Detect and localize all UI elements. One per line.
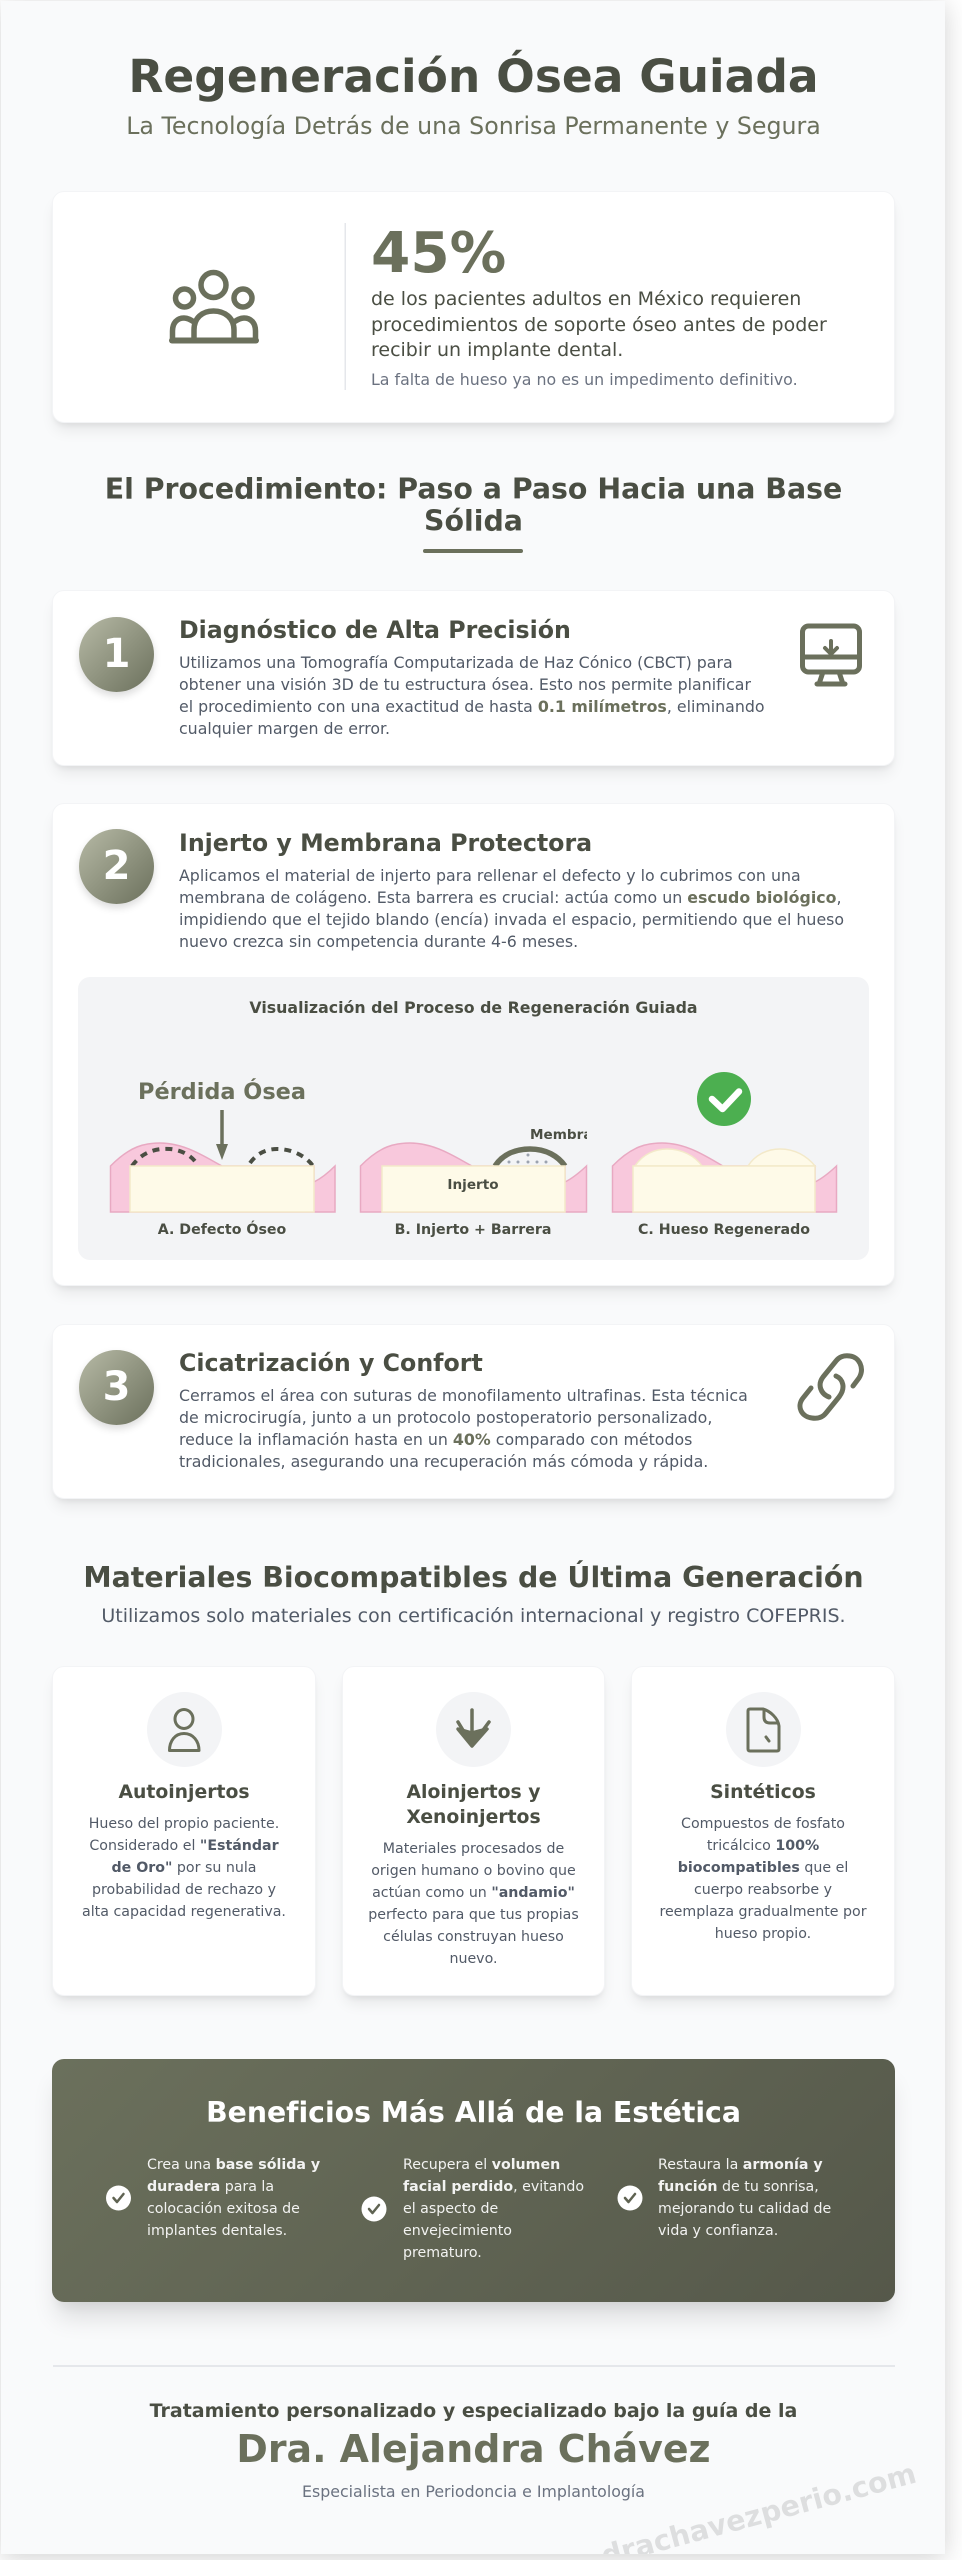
material text: Compuestos de fosfato <box>681 1816 845 1832</box>
footer <box>53 2365 895 2501</box>
material text: de Oro" por su nula <box>112 1860 256 1876</box>
materials subtitle: Utilizamos solo materiales con certificación internacional y registro COFEPRIS. <box>101 1605 846 1627</box>
benefit 3: vida y confianza. <box>658 2223 778 2239</box>
step 3 text: Cerramos el área con suturas de monofilamento ultrafinas. Esta técnica <box>179 1386 748 1405</box>
icon: document <box>748 1709 779 1751</box>
statistic description: procedimientos de soporte óseo antes de poder <box>371 314 827 336</box>
icon: person <box>170 1710 199 1750</box>
benefit 1 <box>106 2157 320 2239</box>
panel: material aloinjertos <box>342 1666 605 1996</box>
icon background <box>726 1692 800 1767</box>
step number 3 <box>79 1350 154 1425</box>
label: bone loss: Pérdida Ósea <box>138 1077 306 1105</box>
material text: nuevo. <box>449 1951 498 1967</box>
step number 3: 3 <box>103 1364 130 1410</box>
icon: monitor with download arrow <box>802 626 860 684</box>
material text: alta capacidad regenerativa. <box>82 1904 286 1920</box>
benefit 3: Restaura la armonía y <box>658 2157 823 2173</box>
panel: statistic 45% <box>52 191 895 423</box>
divider <box>344 223 346 390</box>
benefits title: Beneficios Más Allá de la Estética <box>206 2096 741 2129</box>
heading: materials <box>83 1560 864 1627</box>
material text: origen humano o bovino que <box>371 1863 576 1879</box>
step 2 text: nuevo crezca sin competencia durante 4-6 meses. <box>179 932 578 951</box>
material text: perfecto para que tus propias <box>368 1907 579 1923</box>
material text: probabilidad de rechazo y <box>92 1882 276 1898</box>
icon: group of people <box>172 272 256 340</box>
material title: Aloinjertos y <box>407 1782 540 1803</box>
diagram C: regenerated bone <box>612 1072 836 1238</box>
benefit 2 <box>362 2157 584 2261</box>
benefit 2: Recupera el volumen <box>403 2157 560 2173</box>
step 1 text: Utilizamos una Tomografía Computarizada de Haz Cónico (CBCT) para <box>179 653 733 672</box>
heading underline <box>423 549 523 553</box>
material text: Hueso del propio paciente. <box>89 1816 279 1832</box>
label: membrane: Membrana <box>530 1127 611 1143</box>
step 2 text <box>179 866 844 951</box>
material text <box>659 1816 867 1942</box>
step 2 title: Injerto y Membrana Protectora <box>179 829 592 857</box>
icon background <box>146 1692 222 1767</box>
step 3 text: de microcirugía, junto a un protocolo postoperatorio personalizado, <box>179 1408 712 1427</box>
benefit 1: duradera para la <box>147 2179 274 2195</box>
panel: step 1 <box>52 590 895 766</box>
benefit 1: implantes dentales. <box>147 2223 287 2239</box>
statistic note: La falta de hueso ya no es un impedimento definitivo. <box>371 370 798 389</box>
material text: biocompatibles que el <box>678 1860 848 1876</box>
material text: hueso propio. <box>715 1926 811 1942</box>
material text: actúan como un "andamio" <box>372 1885 575 1901</box>
step 1 title: Diagnóstico de Alta Precisión <box>179 616 571 644</box>
step 3 text: tradicionales, asegurando una recuperación más cómoda y rápida. <box>179 1452 708 1471</box>
step 1 text: el procedimiento con una exactitud de hasta 0.1 milímetros, eliminando <box>179 697 765 716</box>
step number 2 <box>79 829 154 904</box>
material text: células construyan hueso <box>383 1929 564 1945</box>
panel: step 2 <box>52 803 895 1286</box>
icon: chain link <box>800 1356 861 1418</box>
statistic description <box>371 288 827 361</box>
panel: material autoinjertos <box>52 1666 316 1996</box>
material text <box>82 1816 286 1920</box>
big number: 45% <box>371 221 506 286</box>
material title <box>406 1782 541 1828</box>
step 1 text <box>179 653 765 738</box>
panel: step 3 <box>52 1324 895 1499</box>
step 2 text: impidiendo que el tejido blando (encía) invada el espacio, permitiendo que el hueso <box>179 910 844 929</box>
caption A: A. Defecto Óseo <box>158 1220 287 1238</box>
subtitle: La Tecnología Detrás de una Sonrisa Permanente y Segura <box>126 112 821 140</box>
benefit 3 <box>618 2157 831 2239</box>
step number 1 <box>79 617 154 692</box>
step number 2: 2 <box>103 843 130 889</box>
benefit 2: prematuro. <box>403 2245 482 2261</box>
footer lead text: Tratamiento personalizado y especializado bajo la guía de la <box>150 2400 797 2422</box>
step 2 text: membrana de colágeno. Esta barrera es crucial: actúa como un escudo biológico, <box>179 888 841 907</box>
label: graft: Injerto <box>447 1177 499 1193</box>
material text: cuerpo reabsorbe y <box>694 1882 832 1898</box>
material title: Xenoinjertos <box>406 1807 541 1828</box>
doctor specialty: Especialista en Periodoncia e Implantología <box>302 2482 645 2501</box>
step number 1: 1 <box>103 631 130 677</box>
heading: procedure <box>105 472 842 553</box>
heading text <box>105 472 842 538</box>
panel: benefits <box>52 2059 895 2302</box>
material title: Autoinjertos <box>118 1782 250 1803</box>
benefit 2: envejecimiento <box>403 2223 512 2239</box>
benefit 2: el aspecto de <box>403 2201 498 2217</box>
step 3 text: reduce la inflamación hasta en un 40% comparado con métodos <box>179 1430 692 1449</box>
statistic description: de los pacientes adultos en México requieren <box>371 288 801 310</box>
diagram A: bone defect <box>110 1077 335 1238</box>
caption B: B. Injerto + Barrera <box>395 1222 551 1238</box>
benefit 3: función de tu sonrisa, <box>658 2179 819 2195</box>
step 3 title: Cicatrización y Confort <box>179 1349 483 1377</box>
doctor name: Dra. Alejandra Chávez <box>236 2427 711 2471</box>
heading text: El Procedimiento: Paso a Paso Hacia una Base <box>105 472 842 506</box>
material text <box>368 1841 579 1967</box>
visualization title: Visualización del Proceso de Regeneración Guiada <box>249 998 698 1017</box>
statistic description: recibir un implante dental. <box>371 339 623 361</box>
main heading: Regeneración Ósea Guiada <box>128 49 819 103</box>
material title: Sintéticos <box>710 1782 816 1803</box>
benefit 1: Crea una base sólida y <box>147 2157 320 2173</box>
arrow: bone loss <box>216 1110 228 1160</box>
step 1 text: obtener una visión 3D de tu estructura ósea. Esto nos permite planificar <box>179 675 751 694</box>
step 3 text <box>179 1386 748 1471</box>
step 2 text: Aplicamos el material de injerto para rellenar el defecto y lo cubrimos con una <box>179 866 801 885</box>
material text: reemplaza gradualmente por <box>659 1904 867 1920</box>
heading text: Sólida <box>424 504 523 538</box>
benefit 1: colocación exitosa de <box>147 2201 300 2217</box>
material text: Considerado el "Estándar <box>89 1838 279 1854</box>
icon background <box>436 1692 511 1767</box>
material text: Materiales procesados de <box>383 1841 564 1857</box>
material text: tricálcico 100% <box>707 1838 819 1854</box>
icon: green check <box>697 1072 751 1126</box>
caption C: C. Hueso Regenerado <box>638 1222 810 1238</box>
title <box>126 49 821 140</box>
panel: material sinteticos <box>631 1666 895 1996</box>
step 1 text: cualquier margen de error. <box>179 719 390 738</box>
benefit 2: facial perdido, evitando <box>403 2179 584 2195</box>
materials title: Materiales Biocompatibles de Última Generación <box>83 1560 864 1594</box>
benefit 3: mejorando tu calidad de <box>658 2201 831 2217</box>
icon: down arrow <box>458 1710 489 1746</box>
panel: visualization <box>78 977 869 1260</box>
diagram B: graft and barrier <box>360 1129 588 1237</box>
